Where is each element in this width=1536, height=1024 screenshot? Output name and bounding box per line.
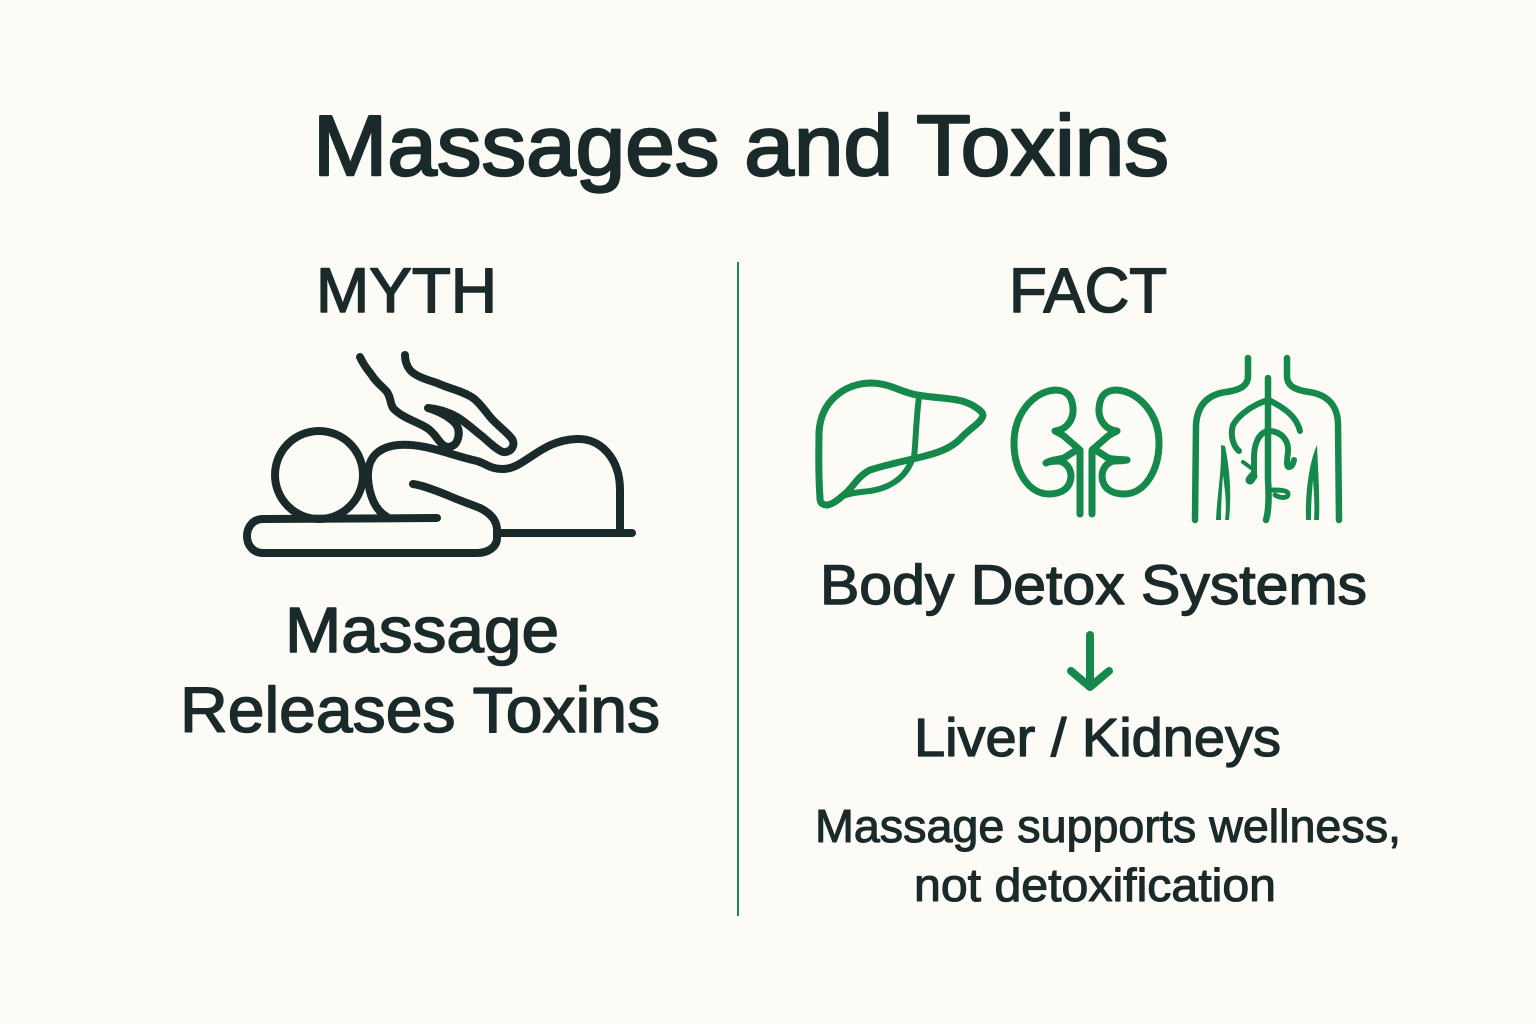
fact conclusion: not detoxification — [914, 859, 1276, 911]
fact conclusion — [815, 800, 1401, 911]
fact heading: FACT — [1009, 256, 1167, 326]
icon: body detox system — [1195, 358, 1339, 520]
icon: massage — [247, 355, 632, 553]
title: Massages and Toxins — [313, 99, 1169, 194]
body detox systems label: Body Detox Systems — [820, 553, 1367, 616]
liver and kidneys label: Liver / Kidneys — [914, 708, 1281, 768]
fact conclusion: Massage supports wellness, — [815, 800, 1401, 852]
myth statement — [180, 594, 660, 746]
myth heading: MYTH — [316, 256, 497, 326]
myth statement: Releases Toxins — [180, 674, 660, 746]
arrow: down — [1071, 635, 1109, 687]
icon: liver — [819, 383, 983, 505]
panel: myth — [180, 256, 660, 746]
myth statement: Massage — [285, 594, 559, 666]
panel: fact — [815, 256, 1401, 911]
icon: kidneys — [1014, 390, 1159, 514]
